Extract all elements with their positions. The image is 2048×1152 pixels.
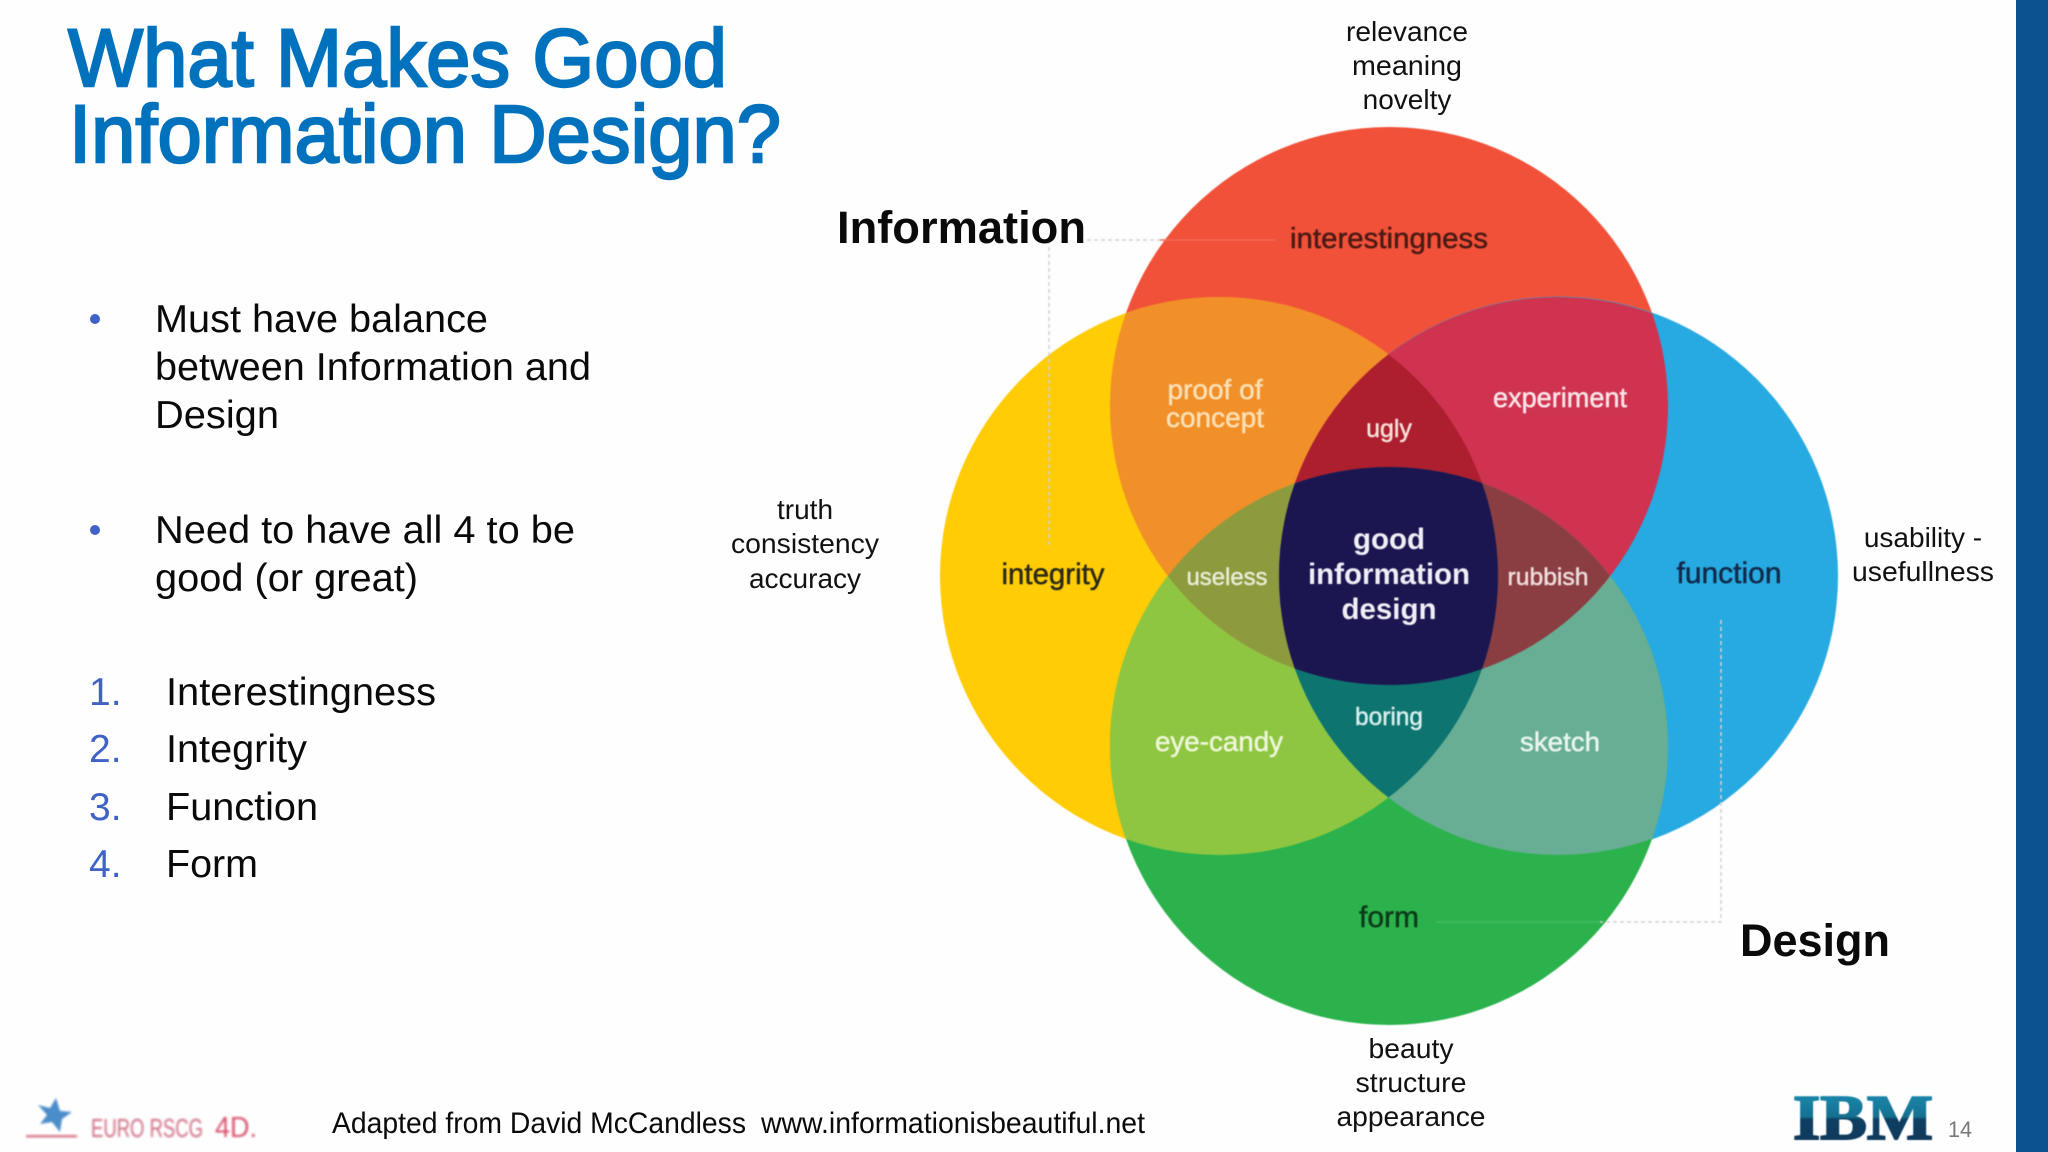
bullet: balance: between Information and [155, 346, 591, 389]
label: good information design: information [1308, 558, 1470, 591]
numbered list: Form [166, 843, 258, 886]
note: integrity qualities: truth [777, 494, 833, 525]
label: good information design: good [1353, 523, 1425, 556]
label: boring: boring [1355, 703, 1423, 731]
overlap: eye-candy [1109, 576, 1389, 856]
overlap: sketch [1388, 576, 1668, 856]
source credit: www.informationisbeautiful.net [760, 1107, 1145, 1140]
label: sketch: sketch [1520, 727, 1600, 757]
note: form qualities: appearance [1336, 1101, 1486, 1132]
label: function: function [1676, 557, 1782, 590]
note: interestingness qualities: novelty [1363, 84, 1451, 115]
heading: information: Information [837, 202, 1086, 253]
label: integrity: integrity [1002, 558, 1104, 591]
circle: function [1279, 296, 1838, 856]
label: eye-candy: eye-candy [1155, 726, 1283, 757]
overlap: good information design [1278, 466, 1498, 686]
label: proof of concept: proof of [1168, 374, 1263, 405]
numbered list: 2. [89, 728, 122, 771]
logo: Euro RSCG 4D: EURO RSCG [91, 1113, 203, 1143]
note: form qualities: structure [1356, 1067, 1466, 1098]
note: interestingness qualities [1346, 16, 1468, 115]
numbered list: Interestingness [166, 671, 436, 714]
note: integrity qualities: consistency [731, 528, 879, 559]
overlap: experiment [1388, 296, 1669, 576]
right edge bar [2016, 0, 2048, 1152]
label: proof of concept: concept [1166, 402, 1264, 433]
connector: design [1600, 620, 1721, 922]
note: function qualities: usefullness [1852, 556, 1994, 587]
label: useless: useless [1186, 564, 1268, 591]
label: form: form [1359, 901, 1419, 934]
connector: design inside green [1436, 921, 1600, 923]
overlap: rubbish [1482, 482, 1610, 670]
title: What Makes Good [68, 13, 727, 104]
numbered list: 3. [89, 786, 122, 829]
title [68, 13, 781, 180]
bullet: balance: Design [155, 394, 279, 437]
bullet: need all four [90, 509, 575, 600]
label: ugly: ugly [1366, 415, 1412, 443]
label: interestingness: interestingness [1290, 223, 1488, 255]
connector: information inside red [1160, 239, 1275, 241]
circle: interestingness [1110, 127, 1668, 685]
circle: form [1110, 467, 1668, 1025]
label: proof of concept [1166, 374, 1264, 433]
bullet: balance [90, 298, 591, 437]
circle: integrity [940, 297, 1498, 855]
overlap: ugly [1294, 354, 1482, 484]
note: interestingness qualities: relevance [1346, 16, 1468, 47]
page number: 14 [1948, 1117, 1972, 1142]
note: interestingness qualities: meaning [1352, 50, 1462, 81]
logo: Euro RSCG 4D: 4D. [215, 1112, 257, 1144]
heading: design: Design [1740, 915, 1890, 966]
bullet: need all four: Need to have all 4 to be [155, 509, 575, 552]
label: rubbish: rubbish [1508, 564, 1588, 591]
label: good information design: design [1341, 593, 1437, 626]
connector: information [1049, 240, 1160, 545]
bullet: balance: Must have balance [155, 298, 488, 341]
overlap: proof of concept [1110, 296, 1388, 576]
note: integrity qualities [731, 494, 879, 594]
note: function qualities: usability - [1864, 522, 1982, 553]
numbered list: Integrity [166, 728, 308, 771]
source credit [332, 1107, 1145, 1140]
bullet: need all four: good (or great) [155, 557, 418, 600]
numbered list [89, 671, 436, 886]
numbered list: Function [166, 786, 318, 829]
logo: Euro RSCG 4D [26, 1098, 257, 1144]
label: experiment: experiment [1493, 382, 1627, 413]
venn diagram [940, 127, 1838, 1025]
overlap: useless [1168, 484, 1295, 668]
label: good information design [1308, 523, 1470, 626]
note: form qualities: beauty [1368, 1033, 1454, 1064]
logo: IBM: IBM [1793, 1082, 1933, 1152]
note: form qualities [1336, 1033, 1486, 1132]
note: function qualities [1852, 522, 1994, 587]
numbered list: 4. [89, 843, 122, 886]
overlap: boring [1278, 466, 1498, 798]
note: integrity qualities: accuracy [749, 563, 861, 594]
source credit: Adapted from David McCandless [332, 1107, 746, 1140]
title: Information Design? [69, 89, 781, 180]
numbered list: 1. [89, 671, 122, 714]
